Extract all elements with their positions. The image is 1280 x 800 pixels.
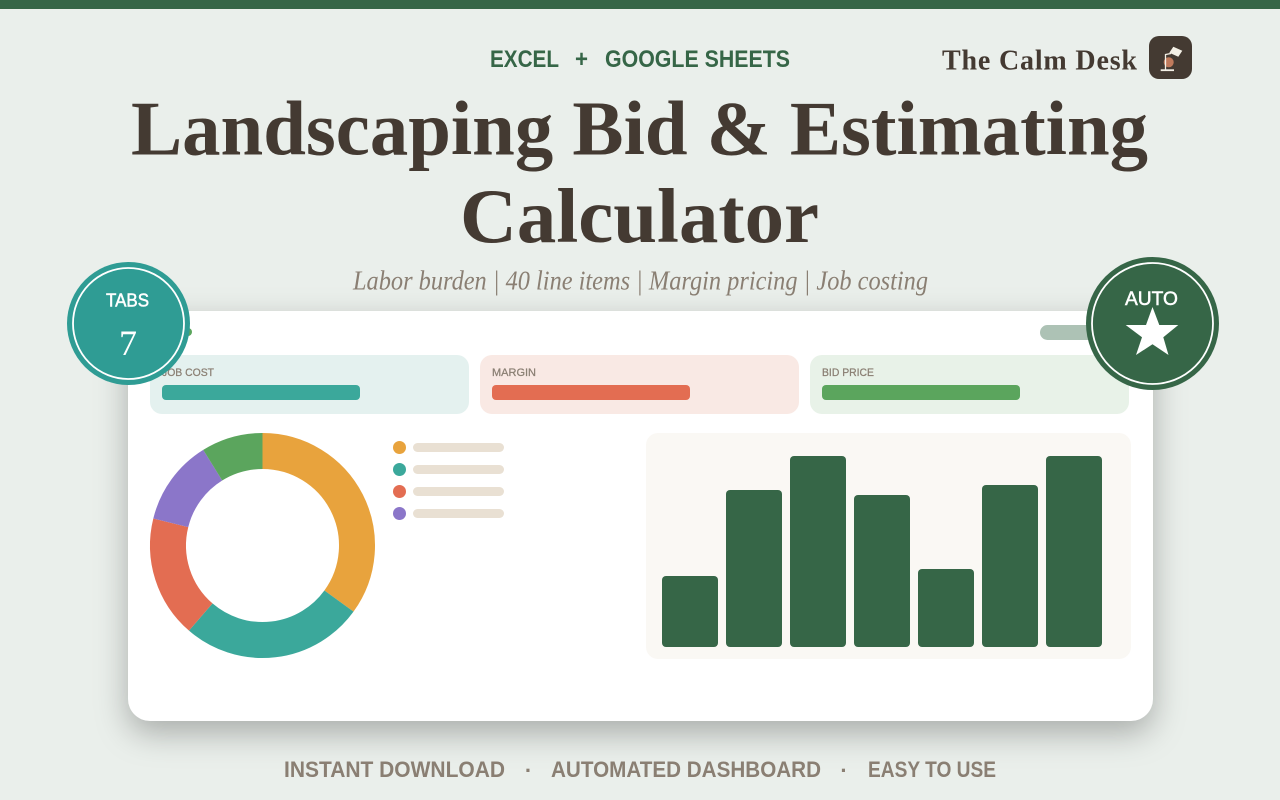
badge: auto star: AUTO (1125, 289, 1178, 310)
top band (0, 0, 1280, 9)
window pill (1040, 325, 1110, 340)
title (131, 86, 1148, 259)
bar chart (646, 433, 1131, 659)
panel: job cost: JOB COST (162, 367, 214, 379)
footer features: · (840, 758, 848, 783)
platform heading: GOOGLE SHEETS (605, 46, 790, 73)
footer features: AUTOMATED DASHBOARD (551, 757, 821, 782)
title: Calculator (460, 173, 819, 259)
panel: margin (480, 355, 799, 414)
title: Landscaping Bid & Estimating (131, 86, 1148, 172)
donut chart (168, 451, 357, 640)
platform heading (490, 46, 790, 73)
panel: bid price: BID PRICE (822, 367, 874, 379)
badge: tabs 7: 7 (119, 323, 137, 363)
footer features: · (525, 758, 532, 783)
subtitle: Labor burden | 40 line items | Margin pricing | Job costing (352, 266, 928, 296)
panel: job cost (150, 355, 469, 414)
badge: tabs 7 (67, 262, 190, 385)
footer features: EASY TO USE (868, 757, 996, 782)
badge: tabs 7: TABS (106, 290, 149, 310)
platform heading: + (575, 46, 588, 73)
badge: auto star (1086, 257, 1219, 390)
footer features (284, 757, 996, 783)
panel: margin: MARGIN (492, 367, 536, 379)
window dot (184, 328, 192, 336)
icon: star (1126, 307, 1178, 355)
brand name: The Calm Desk (942, 46, 1137, 76)
icon: desk lamp logo (1149, 36, 1192, 79)
footer features: INSTANT DOWNLOAD (284, 757, 505, 782)
platform heading: EXCEL (490, 46, 559, 73)
panel: bid price (810, 355, 1129, 414)
legend (393, 441, 504, 520)
panel: dashboard card (128, 311, 1153, 721)
